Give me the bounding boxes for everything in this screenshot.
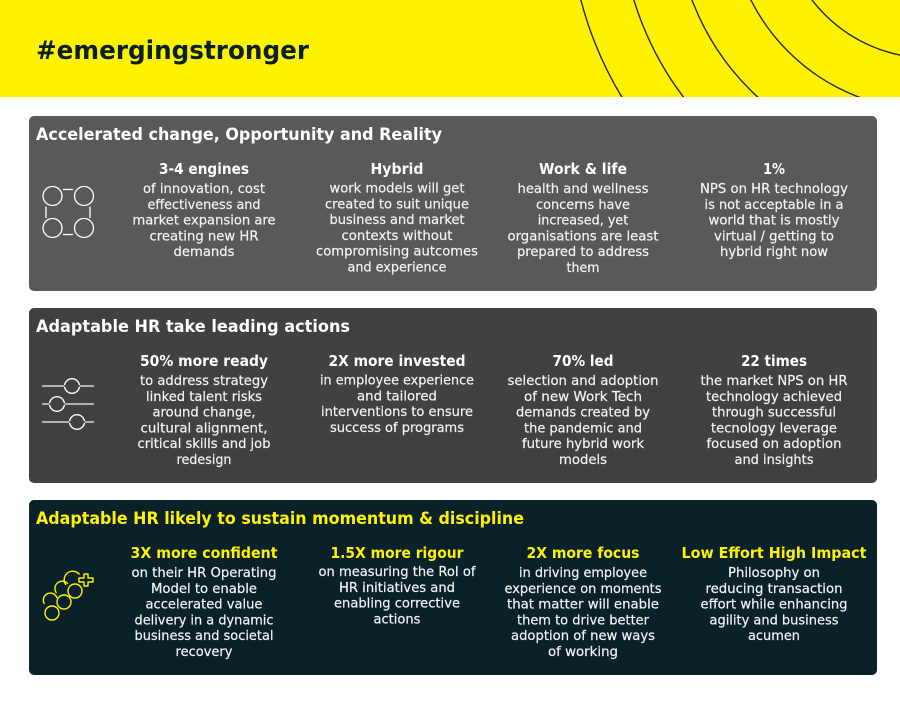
text block: 3-4 engines xyxy=(132,160,276,260)
text block: 2X more focus: adoption of new ways xyxy=(511,628,655,644)
text block: hybrid: business and market xyxy=(330,212,464,228)
text block: 50% more ready xyxy=(138,352,270,468)
text block: 2X more focus: in driving employee xyxy=(519,565,647,581)
text block: 50% more ready: 50% more ready xyxy=(140,352,268,370)
title: #emergingstronger xyxy=(36,36,309,66)
text block: 1%: world that is mostly xyxy=(708,213,840,229)
text block: 70% led: the pandemic and xyxy=(524,420,642,436)
text block: 50% more ready: around change, xyxy=(152,405,256,421)
text block: 3X more confident: 3X more confident xyxy=(130,544,278,562)
text block: 50% more ready: cultural alignment, xyxy=(140,420,268,436)
text block: 70% led: models xyxy=(559,452,607,468)
text block: 50% more ready: to address strategy xyxy=(140,373,268,389)
text block: 2X more invested xyxy=(320,352,474,436)
text block: 3X more confident: accelerated value xyxy=(146,597,262,613)
panel heading: Adaptable HR likely to sustain momentum & discipline xyxy=(36,509,524,528)
text block: hybrid: and experience xyxy=(348,260,446,276)
panel: sustain momentum and discipline xyxy=(29,500,877,675)
text block: 1.5X more rigour: actions xyxy=(374,611,420,627)
header band xyxy=(0,0,900,97)
text block: low effort high impact xyxy=(682,544,866,644)
text block: low effort high impact: effort while enhancing xyxy=(700,597,848,613)
text block: 3-4 engines: creating new HR xyxy=(150,228,259,244)
text block: 2X more focus: of working xyxy=(548,644,618,660)
text block: 3X more confident: on their HR Operating xyxy=(132,565,276,581)
text block: 1.5X more rigour: on measuring the RoI of xyxy=(318,564,477,580)
text block: hybrid: compromising autcomes xyxy=(316,244,478,260)
text block: 3-4 engines: 3-4 engines xyxy=(159,160,249,178)
text block: 3X more confident: recovery xyxy=(176,644,232,660)
text block: 2X more focus: them to drive better xyxy=(517,612,649,628)
text block: work and life: them xyxy=(566,260,600,276)
text block: 50% more ready: critical skills and job xyxy=(138,436,270,452)
header arcs xyxy=(580,0,900,97)
icon: four linked circles xyxy=(43,186,94,238)
text block: 70% led: selection and adoption xyxy=(508,373,658,389)
panel: adaptable HR leading actions xyxy=(29,308,877,483)
text block: 1%: 1% xyxy=(763,160,785,178)
text block: 1%: is not acceptable in a xyxy=(704,197,844,213)
text block: 22 times: through successful xyxy=(712,405,836,421)
text block: work and life xyxy=(508,160,658,276)
text block: 2X more invested: interventions to ensure xyxy=(321,404,473,420)
panel: accelerated change xyxy=(29,116,877,291)
text block: 22 times: tecnology leverage xyxy=(711,420,837,436)
icon: sliders xyxy=(42,379,94,429)
text block: work and life: organisations are least xyxy=(508,228,658,244)
text block: low effort high impact: agility and business xyxy=(710,612,838,628)
text block: 2X more invested: and tailored xyxy=(357,388,437,404)
text block: 70% led: 70% led xyxy=(552,352,614,370)
text block: 3X more confident xyxy=(130,544,278,660)
text block: 22 times: 22 times xyxy=(741,352,807,370)
text block: 3-4 engines: market expansion are xyxy=(132,213,276,229)
text block: 3X more confident: Model to enable xyxy=(151,581,257,597)
text block: 50% more ready: linked talent risks xyxy=(146,389,262,405)
text block: 1% xyxy=(700,160,848,260)
text block: work and life: prepared to address xyxy=(517,244,649,260)
text block: hybrid: work models will get xyxy=(330,180,464,196)
text block: low effort high impact: Philosophy on xyxy=(728,565,820,581)
text block: hybrid: created to suit unique xyxy=(325,196,469,212)
text block: low effort high impact: reducing transaction xyxy=(706,581,842,597)
text block: work and life: health and wellness xyxy=(518,181,648,197)
text block: 22 times: technology achieved xyxy=(706,389,842,405)
text block: 3-4 engines: demands xyxy=(174,244,234,260)
text block: 3X more confident: business and societal xyxy=(134,628,274,644)
text block: work and life: concerns have xyxy=(536,197,630,213)
text block: work and life: increased, yet xyxy=(538,213,628,229)
text block: 2X more focus: that matter will enable xyxy=(507,597,659,613)
text block: 1%: NPS on HR technology xyxy=(700,181,848,197)
text block: 50% more ready: redesign xyxy=(176,452,232,468)
panel heading: Accelerated change, Opportunity and Reality xyxy=(36,125,442,144)
text block: 3X more confident: delivery in a dynamic xyxy=(134,612,274,628)
text block: low effort high impact: Low Effort High Impact xyxy=(682,544,866,562)
text block: hybrid xyxy=(316,160,478,276)
text block: hybrid: contexts without xyxy=(342,228,452,244)
text block: 1.5X more rigour xyxy=(318,544,477,627)
text block: 2X more invested: success of programs xyxy=(330,420,464,436)
icon: circles and plus xyxy=(43,571,93,620)
text block: hybrid: Hybrid xyxy=(370,160,424,178)
text block: 3-4 engines: effectiveness and xyxy=(148,197,260,213)
panel heading: Adaptable HR take leading actions xyxy=(36,317,350,336)
text block: 22 times: focused on adoption xyxy=(706,436,842,452)
text block: 2X more focus: 2X more focus xyxy=(526,544,640,562)
text block: 3-4 engines: of innovation, cost xyxy=(143,181,265,197)
text block: 22 times xyxy=(700,352,848,468)
text block: 2X more focus xyxy=(504,544,662,660)
text block: 22 times: and insights xyxy=(734,452,814,468)
text block: 2X more focus: experience on moments xyxy=(504,581,662,597)
text block: 2X more invested: 2X more invested xyxy=(328,352,466,370)
text block: 1%: virtual / getting to xyxy=(714,228,834,244)
text block: 70% led: future hybrid work xyxy=(522,436,644,452)
text block: 1.5X more rigour: HR initiatives and xyxy=(339,580,455,596)
text block: 1.5X more rigour: enabling corrective xyxy=(334,596,460,612)
text block: 1%: hybrid right now xyxy=(720,244,828,260)
text block: low effort high impact: acumen xyxy=(748,628,800,644)
text block: 22 times: the market NPS on HR xyxy=(700,373,848,389)
text block: 70% led: demands created by xyxy=(516,405,650,421)
text block: 70% led xyxy=(508,352,658,468)
text block: 1.5X more rigour: 1.5X more rigour xyxy=(330,544,464,562)
text block: 70% led: of new Work Tech xyxy=(524,389,642,405)
text block: 2X more invested: in employee experience xyxy=(320,372,474,388)
text block: work and life: Work & life xyxy=(539,160,627,178)
